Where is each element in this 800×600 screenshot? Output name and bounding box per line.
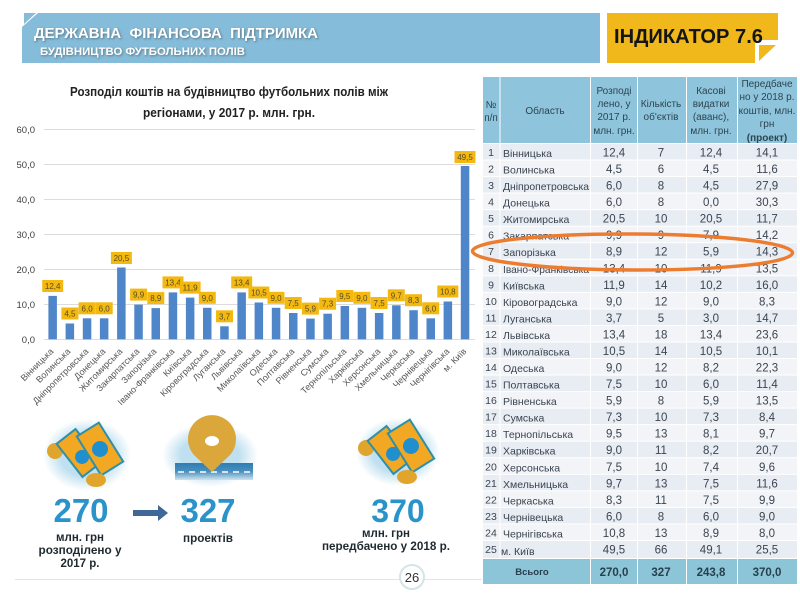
table rows: 5,9: [703, 247, 719, 259]
table rows: 2: [488, 164, 494, 176]
y axis labels: 10,0: [16, 300, 35, 311]
table rows: 6,0: [703, 511, 719, 523]
bars with value labels: 4,5: [64, 310, 76, 318]
table rows: 10: [655, 412, 667, 424]
region labels: Полтавська: [255, 346, 296, 388]
stat: 327: [180, 492, 236, 545]
table rows: 8,9: [606, 247, 622, 259]
chart title: Розподіл коштів на будівництво футбольних полів між: [70, 85, 388, 99]
region labels: Чернігівська: [408, 346, 451, 390]
table rows: Закарпатська: [503, 231, 569, 243]
table rows: 7,5: [606, 462, 622, 474]
table rows: 7,5: [606, 379, 622, 391]
table rows: 3,7: [606, 313, 622, 325]
table rows: 11,9: [603, 280, 625, 292]
table rows: 10,5: [603, 346, 625, 358]
table header: грн: [760, 119, 774, 130]
table rows: 10,5: [700, 346, 722, 358]
table: [483, 77, 797, 584]
stat: 270: [38, 492, 122, 570]
table rows: 8: [658, 197, 664, 209]
table rows: Одеська: [503, 363, 544, 375]
region labels: Хмельницька: [353, 346, 399, 393]
region labels: Тернопільська: [299, 346, 348, 396]
table rows: 9: [488, 279, 494, 291]
table rows: 18: [485, 428, 497, 440]
table header: (проект): [747, 133, 787, 144]
table rows: [483, 144, 797, 558]
bars with value labels: 3,7: [219, 312, 231, 321]
region labels: Сумська: [298, 346, 330, 378]
bars with value labels: 8,3: [408, 296, 420, 305]
table rows: 0,0: [703, 197, 719, 209]
table rows: Черкаська: [503, 495, 554, 507]
table rows: 11,7: [756, 214, 778, 226]
table rows: 5,9: [703, 396, 719, 408]
table rows: Тернопільська: [503, 429, 573, 441]
table rows: 18: [655, 329, 667, 341]
table rows: 14,3: [756, 247, 778, 259]
table rows: Миколаївська: [503, 346, 570, 358]
y axis labels: 20,0: [16, 265, 35, 276]
y axis labels: 50,0: [16, 160, 35, 171]
table rows: 11,4: [756, 379, 778, 391]
table rows: 9,9: [606, 230, 622, 242]
y axis labels: 30,0: [16, 230, 35, 241]
bars with value labels: [42, 151, 475, 339]
table rows: 14,2: [756, 230, 778, 242]
table rows: 22,3: [756, 362, 778, 374]
bars with value labels: 49,5: [457, 153, 473, 162]
table rows: 22: [485, 494, 497, 506]
region labels: м. Київ: [441, 346, 469, 374]
bars with value labels: 13,4: [234, 278, 250, 287]
table rows: 8,1: [703, 429, 719, 441]
table header: лено, у: [597, 99, 631, 110]
table rows: 7: [658, 148, 664, 160]
table header: видатки: [693, 99, 729, 110]
table rows: 6,0: [606, 511, 622, 523]
page number: [15, 565, 482, 589]
table rows: 4,5: [703, 164, 719, 176]
table rows: Харківська: [503, 446, 556, 458]
table rows: 20,5: [700, 214, 722, 226]
table rows: 30,3: [756, 197, 778, 209]
region labels: Херсонська: [341, 346, 382, 388]
table rows: 11: [655, 445, 667, 457]
bars with value labels: 9,0: [202, 294, 213, 303]
table rows: 13,4: [603, 263, 626, 275]
table rows: 19: [485, 445, 497, 457]
table total row: 270,0: [600, 567, 628, 579]
table total row: 327: [651, 567, 671, 579]
stat: 270: розподілено у: [38, 545, 122, 557]
table rows: 3: [488, 180, 494, 192]
table rows: 10,1: [756, 346, 778, 358]
table rows: 9: [658, 230, 664, 242]
table rows: Дніпропетровська: [503, 181, 589, 193]
table rows: 13,5: [756, 396, 778, 408]
table rows: 1: [488, 147, 494, 159]
table rows: Херсонська: [503, 462, 560, 474]
table rows: 10: [655, 263, 667, 275]
table rows: 9,0: [606, 445, 622, 457]
banner heading: ДЕРЖАВНА ФІНАНСОВА ПІДТРИМКА: [34, 25, 318, 42]
table rows: 8,3: [606, 495, 622, 507]
table rows: 11: [655, 495, 667, 507]
bars with value labels: 9,5: [339, 292, 351, 301]
table rows: 17: [485, 412, 497, 424]
table rows: 12: [485, 329, 497, 341]
table rows: 12: [655, 362, 667, 374]
table rows: Чернігівська: [503, 528, 563, 540]
table rows: 6,0: [606, 181, 622, 193]
bars with value labels: 7,5: [288, 299, 299, 308]
bars with value labels: 6,0: [425, 304, 437, 313]
table rows: 25: [485, 544, 497, 556]
stat: 270: 2017 р.: [60, 558, 100, 570]
table rows: 14: [655, 280, 668, 292]
bars with value labels: 9,0: [270, 294, 282, 303]
table rows: 8,9: [703, 528, 719, 540]
bars with value labels: 10,8: [440, 288, 456, 296]
bars with value labels: 11,9: [183, 284, 198, 293]
region labels: Запорізька: [119, 346, 158, 385]
chart title: [70, 85, 388, 120]
y axis labels: 0,0: [22, 335, 35, 346]
region labels: Миколаївська: [215, 346, 262, 394]
table rows: Чернівецька: [503, 512, 563, 524]
table header: коштів, млн.: [739, 106, 795, 117]
region labels: Дніпропетровська: [31, 346, 90, 406]
table rows: 20,5: [603, 214, 625, 226]
table rows: 13: [655, 528, 667, 540]
table rows: 66: [655, 544, 667, 556]
table header: п/п: [484, 113, 498, 124]
table header: (аванс),: [693, 112, 729, 123]
table rows: 6: [658, 164, 664, 176]
table rows: 8: [658, 396, 664, 408]
region labels: Кіровоградська: [158, 346, 210, 399]
stat: 370: млн. грн: [362, 528, 410, 540]
table rows: 8,4: [759, 412, 776, 424]
bars with value labels: 8,9: [150, 294, 162, 303]
table header: об'єктів: [644, 111, 678, 123]
table rows: 9,7: [759, 429, 775, 441]
table rows: 13: [655, 429, 667, 441]
stat: 370: 370: [371, 493, 425, 529]
table rows: 10: [655, 379, 667, 391]
table rows: 21: [485, 478, 497, 490]
table total row: 370,0: [753, 567, 781, 579]
table rows: 7,9: [703, 230, 719, 242]
stat: 270: млн. грн: [56, 532, 104, 544]
table rows: 8,3: [759, 296, 775, 308]
table rows: 14,7: [756, 313, 778, 325]
table rows: 49,1: [700, 544, 722, 556]
table rows: 24: [485, 527, 497, 539]
table rows: 20,7: [756, 445, 778, 457]
bars with value labels: 6,0: [82, 304, 93, 313]
table header: Касові: [696, 86, 726, 97]
table rows: 8: [488, 263, 494, 275]
bars with value labels: 7,3: [322, 300, 334, 309]
stat: 327: 327: [180, 492, 236, 529]
table header: 2017 р.: [597, 112, 631, 123]
table rows: 9,7: [606, 478, 622, 490]
table rows: 6,0: [606, 197, 622, 209]
region labels: Львівська: [209, 346, 244, 382]
region labels: Чернівецька: [391, 346, 434, 390]
table rows: 14,1: [756, 148, 778, 160]
region labels: Рівненська: [274, 346, 313, 386]
table rows: 7,3: [703, 412, 719, 424]
table total row: Всього: [515, 567, 549, 578]
region labels: Вінницька: [19, 346, 55, 383]
table rows: 9,0: [703, 296, 719, 308]
table rows: м. Київ: [501, 546, 535, 558]
y axis labels: 40,0: [16, 195, 35, 206]
table rows: Львівська: [503, 330, 550, 342]
table rows: 13,4: [603, 329, 626, 341]
table header: №: [486, 100, 497, 111]
table rows: 12: [655, 247, 667, 259]
table rows: 9,9: [759, 495, 775, 507]
region labels: Харківська: [327, 346, 365, 385]
table rows: 8,2: [703, 445, 719, 457]
table rows: 12,4: [700, 148, 723, 160]
bars with value labels: 13,4: [165, 278, 181, 287]
table rows: 10: [655, 214, 667, 226]
bars with value labels: 9,7: [391, 291, 402, 300]
table rows: 9,0: [606, 362, 622, 374]
table rows: 9,5: [606, 429, 622, 441]
table rows: 7,5: [703, 495, 719, 507]
table rows: 10,8: [603, 528, 625, 540]
table rows: 9,0: [606, 296, 622, 308]
table rows: 49,5: [603, 544, 625, 556]
table rows: 27,9: [756, 181, 778, 193]
table rows: Полтавська: [503, 380, 560, 392]
table rows: 13: [485, 346, 497, 358]
table rows: Луганська: [503, 313, 552, 325]
table rows: 12,4: [603, 148, 626, 160]
bars with value labels: 7,5: [374, 299, 385, 308]
table rows: 14: [655, 346, 668, 358]
bars with value labels: 6,0: [99, 304, 110, 313]
table rows: 12: [655, 296, 667, 308]
table rows: 4,5: [703, 181, 719, 193]
table header: Передбаче: [741, 78, 793, 90]
table rows: 5,9: [606, 396, 622, 408]
banner subheading: БУДІВНИЦТВО ФУТБОЛЬНИХ ПОЛІВ: [40, 46, 245, 58]
table rows: 11,9: [700, 263, 722, 275]
bars with value labels: 12,4: [45, 282, 61, 291]
region labels: Житомирська: [77, 346, 124, 394]
bars with value labels: 10,5: [251, 288, 267, 298]
table rows: Волинська: [503, 164, 555, 176]
table rows: Кіровоградська: [503, 297, 578, 309]
table rows: 5: [658, 313, 664, 325]
table header: [483, 77, 797, 144]
table rows: Вінницька: [503, 148, 552, 160]
region labels: Івано-Франківська: [116, 346, 176, 407]
table header: млн. грн.: [690, 126, 732, 137]
stat: 370: [322, 493, 450, 553]
table header: Область: [525, 105, 565, 117]
table rows: Хмельницька: [503, 479, 568, 491]
icon: money 2017: [43, 419, 131, 491]
callout: highlight ellipse around row 7: [472, 233, 793, 271]
table rows: 9,6: [759, 462, 775, 474]
stat: 370: передбачено у 2018 р.: [322, 541, 450, 553]
table total row: [483, 559, 797, 584]
table rows: 25,5: [756, 544, 778, 556]
table rows: Сумська: [503, 413, 544, 425]
region labels: Київська: [161, 346, 193, 379]
table rows: 8: [658, 181, 664, 193]
indicator badge: [607, 13, 778, 63]
header banner: [22, 13, 600, 63]
indicator text: ІНДИКАТОР 7.6: [614, 26, 763, 48]
table header: но у 2018 р.: [739, 92, 795, 103]
table rows: 7,3: [606, 412, 622, 424]
region labels: Луганська: [191, 346, 227, 383]
page number: 26: [405, 570, 419, 585]
table rows: 13: [655, 478, 667, 490]
table rows: 11,6: [756, 478, 778, 490]
table rows: 10: [485, 296, 497, 308]
stat: 327: проектів: [183, 533, 233, 545]
region labels: Одеська: [247, 346, 279, 378]
table rows: 13,4: [700, 329, 723, 341]
table rows: 11: [486, 312, 497, 324]
table rows: 7: [488, 246, 494, 258]
table header: млн. грн.: [593, 126, 635, 137]
table rows: 13,5: [756, 263, 778, 275]
arrow: [133, 505, 168, 521]
table rows: Житомирська: [503, 214, 570, 226]
table rows: 16,0: [756, 280, 778, 292]
stat: 270: 270: [53, 492, 109, 529]
table rows: 15: [485, 379, 497, 391]
table rows: 20: [485, 461, 497, 473]
table rows: 3,0: [703, 313, 719, 325]
table rows: 8: [658, 511, 664, 523]
icon: location pin on road: [162, 415, 258, 487]
bars with value labels: 9,0: [356, 294, 368, 303]
table rows: Івано-Франківська: [503, 264, 589, 276]
table rows: 8,2: [703, 362, 719, 374]
bar chart: [16, 125, 476, 407]
table rows: 7,4: [703, 462, 720, 474]
table rows: 5: [488, 213, 494, 225]
bars with value labels: 9,9: [133, 291, 145, 300]
chart title: регіонами, у 2017 р. млн. грн.: [143, 106, 315, 120]
table rows: 9,0: [759, 511, 775, 523]
table rows: Київська: [503, 280, 545, 292]
table rows: 14: [485, 362, 497, 374]
table header: Кількість: [641, 99, 681, 110]
y axis labels: [16, 125, 35, 346]
table rows: 10: [655, 462, 667, 474]
table rows: 11,6: [756, 164, 778, 176]
region labels: [19, 346, 469, 407]
table rows: 23,6: [756, 329, 778, 341]
region labels: Донецька: [72, 346, 107, 382]
region labels: Закарпатська: [94, 346, 141, 393]
table rows: 8,0: [759, 528, 775, 540]
table rows: Запорізька: [503, 247, 556, 259]
table rows: 23: [485, 511, 497, 523]
region labels: Черкаська: [379, 346, 416, 384]
table rows: 6: [488, 230, 494, 242]
bars with value labels: 5,9: [305, 305, 317, 314]
table rows: Донецька: [503, 198, 550, 210]
region labels: Волинська: [34, 346, 72, 385]
y axis labels: 60,0: [16, 125, 35, 136]
bars with value labels: 20,5: [114, 254, 130, 263]
table rows: 6,0: [703, 379, 719, 391]
icon: money 2018: [356, 418, 440, 486]
table rows: 7,5: [703, 478, 719, 490]
table header: Розподі: [596, 86, 632, 97]
table total row: 243,8: [697, 567, 726, 579]
table rows: 16: [485, 395, 497, 407]
table rows: 4,5: [606, 164, 622, 176]
table rows: 10,2: [700, 280, 722, 292]
table rows: Рівненська: [503, 396, 557, 408]
table rows: 4: [488, 197, 494, 209]
